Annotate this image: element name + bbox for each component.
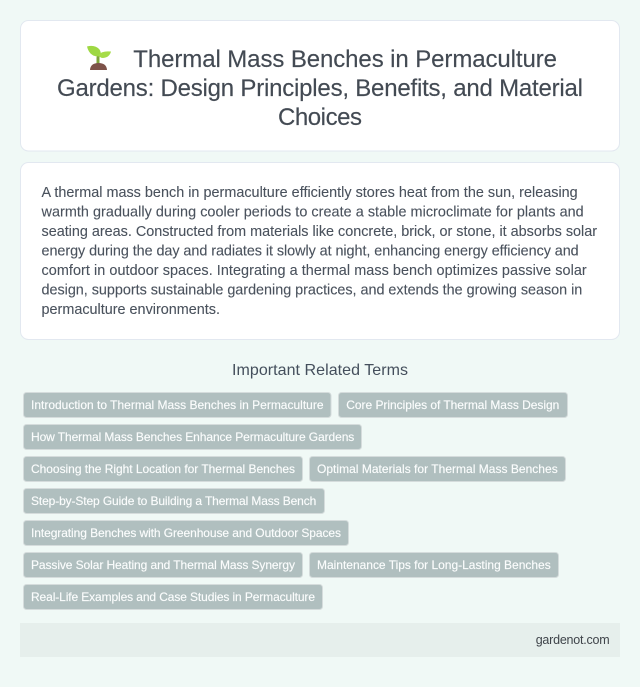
icon: sprout [87, 46, 111, 70]
description text: energy during the day and radiates it slowly at night, enhancing energy efficiency and [42, 244, 579, 260]
chip: passive solar: Passive Solar Heating and Thermal Mass Synergy [31, 558, 295, 572]
chip: step-by-step guide [24, 488, 324, 514]
footer [20, 623, 620, 657]
description text: design, supports sustainable gardening practices, and extends the growing season in [42, 282, 582, 298]
chip: optimal materials: Optimal Materials for Thermal Mass Benches [317, 462, 558, 476]
chip: maintenance tips [310, 552, 558, 578]
description text: A thermal mass bench in permaculture efficiently stores heat from the sun, releasing [42, 185, 578, 201]
description text: seating areas. Constructed from materials like concrete, brick, or stone, it absorbs solar [42, 224, 597, 240]
description text: warmth gradually during cooler periods to create a stable microclimate for plants and [40, 204, 584, 220]
panel: related terms chips [24, 392, 568, 610]
description text [40, 185, 597, 318]
chip: how benches enhance: How Thermal Mass Benches Enhance Permaculture Gardens [31, 430, 354, 444]
chip: right location [24, 456, 302, 482]
chip: real-life examples [24, 584, 322, 610]
title text: Choices [278, 104, 362, 131]
description text: comfort in outdoor spaces. Integrating a thermal mass bench optimizes passive solar [42, 263, 587, 279]
chip: integrating benches [24, 520, 348, 546]
chip: introduction: Introduction to Thermal Mass Benches in Permaculture [31, 398, 324, 412]
chip: passive solar [24, 552, 302, 578]
title text [57, 46, 583, 131]
heading: important related terms: Important Related Terms [232, 362, 408, 379]
panel: title card [20, 20, 620, 151]
chip: core principles: Core Principles of Thermal Mass Design [346, 398, 559, 412]
chip: how benches enhance [24, 424, 362, 450]
chip: step-by-step guide: Step-by-Step Guide to Building a Thermal Mass Bench [31, 494, 316, 508]
chip: integrating benches: Integrating Benches with Greenhouse and Outdoor Spaces [31, 526, 341, 540]
chip: real-life examples: Real-Life Examples and Case Studies in Permaculture [31, 590, 315, 604]
title text: Thermal Mass Benches in Permaculture [133, 46, 557, 73]
panel: description [20, 162, 620, 340]
chip: maintenance tips: Maintenance Tips for Long-Lasting Benches [317, 558, 551, 572]
title text: Gardens: Design Principles, Benefits, and Material [57, 75, 583, 102]
chip: right location: Choosing the Right Location for Thermal Benches [31, 462, 295, 476]
chip: optimal materials [310, 456, 566, 482]
chip: core principles [338, 392, 568, 418]
chip: introduction [24, 392, 331, 418]
description text: permaculture environments. [42, 302, 220, 318]
footer: gardenot.com [536, 633, 610, 647]
